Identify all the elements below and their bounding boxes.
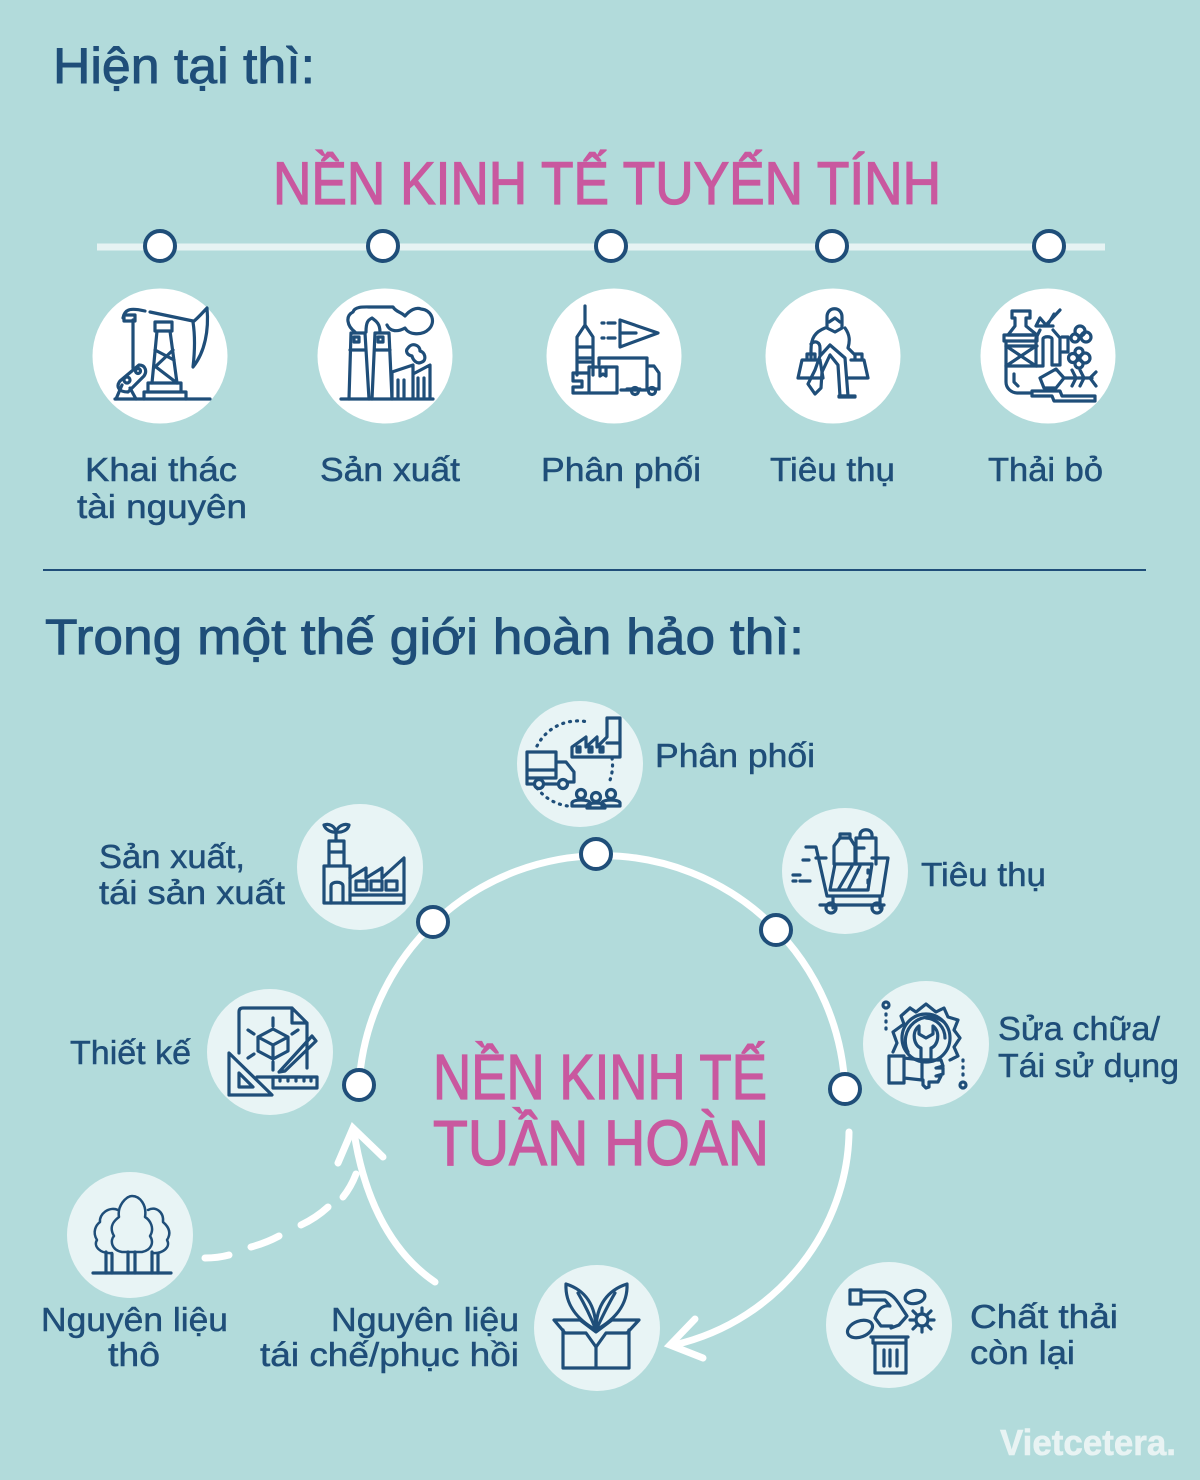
label: residual waste: còn lại: [970, 1334, 1075, 1371]
label: recycled materials: Nguyên liệu: [331, 1301, 519, 1338]
linear timeline: [97, 231, 1105, 261]
arrow: waste to recycled materials: [670, 1132, 849, 1358]
label: raw materials: thô: [108, 1336, 160, 1373]
title: circular economy: [433, 1041, 769, 1179]
icon: factory smoke: [318, 288, 452, 424]
icon: residual waste: [826, 1262, 952, 1388]
arrow: dashed raw materials to design: [205, 1174, 356, 1258]
label: repair and reuse: Sửa chữa/: [998, 1010, 1161, 1047]
label: residual waste: Chất thải: [970, 1298, 1118, 1335]
label: production and remanufacturing: Sản xuất,: [99, 838, 245, 875]
label: repair and reuse: Tái sử dụng: [998, 1047, 1179, 1084]
label: repair and reuse: [998, 1010, 1179, 1084]
icon: green factory: [297, 804, 423, 930]
icon: design tools: [207, 989, 333, 1115]
label: disposal: Thải bỏ: [988, 451, 1103, 488]
label: resource extraction: tài nguyên: [77, 488, 247, 525]
label: design: Thiết kế: [70, 1034, 191, 1071]
title: circular economy: NỀN KINH TẾ: [433, 1041, 767, 1113]
label: consumption: Tiêu thụ: [770, 451, 895, 488]
label: distribution: Phân phối: [655, 737, 815, 774]
heading: currently: Hiện tại thì:: [53, 38, 315, 94]
icon: waste: [980, 288, 1116, 424]
label: resource extraction: [77, 451, 247, 525]
label: recycled materials: [260, 1301, 519, 1373]
label: residual waste: [970, 1298, 1118, 1371]
icon: distribution cycle: [517, 701, 643, 827]
heading: in a perfect world: Trong một thế giới hoàn hảo thì:: [45, 609, 804, 665]
title: linear economy: NỀN KINH TẾ TUYẾN TÍNH: [273, 150, 941, 217]
label: production: Sản xuất: [320, 451, 460, 488]
brand logo: Vietcetera.: [1000, 1422, 1176, 1463]
icon: consumer with shopping bags: [766, 288, 900, 424]
title: circular economy: TUẦN HOÀN: [433, 1107, 769, 1179]
icon: oil pump: [92, 288, 228, 424]
label: production and remanufacturing: tái sản xuất: [99, 874, 285, 911]
label: resource extraction: Khai thác: [85, 451, 237, 488]
icon: recycled box with leaves: [534, 1265, 660, 1391]
label: raw materials: [41, 1301, 228, 1373]
icon: trees: [67, 1172, 193, 1298]
arrow: recycled materials to design: [338, 1128, 435, 1282]
icon: distribution: [546, 288, 682, 424]
label: production and remanufacturing: [99, 838, 285, 911]
label: consumption: Tiêu thụ: [921, 856, 1046, 893]
icon: shopping cart: [782, 808, 908, 934]
icon: repair gear: [863, 981, 989, 1107]
label: distribution: Phân phối: [541, 451, 701, 488]
label: recycled materials: tái chế/phục hồi: [260, 1336, 519, 1373]
circular flow arcs and nodes: [344, 839, 860, 1104]
label: raw materials: Nguyên liệu: [41, 1301, 228, 1338]
